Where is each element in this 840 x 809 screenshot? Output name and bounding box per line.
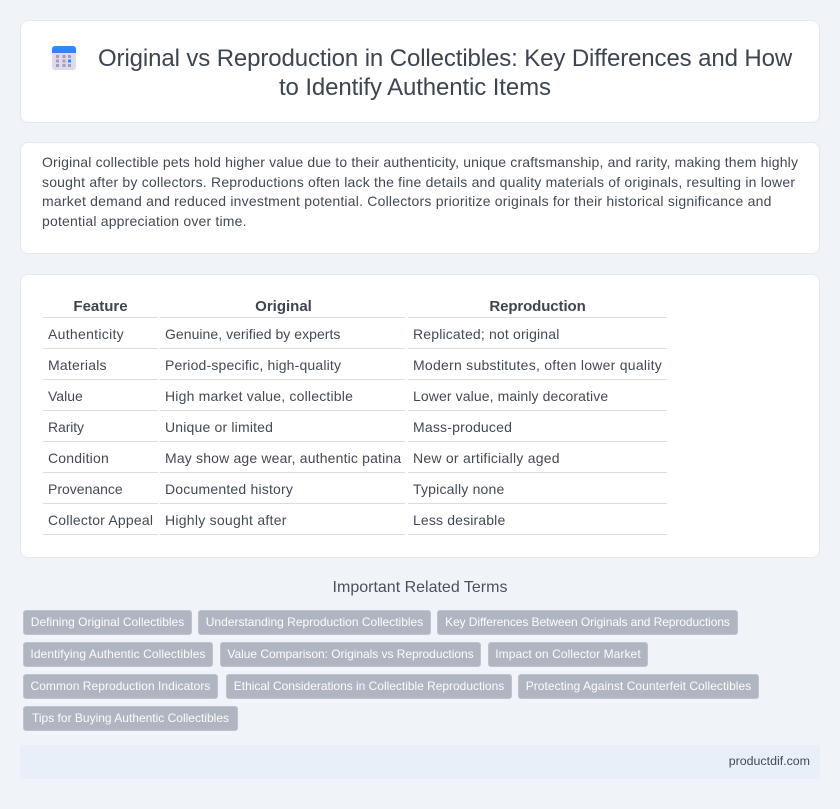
footer bar: [20, 745, 820, 779]
text block: introduction: market demand and reduced investment potential. Collectors prioritize originals for their historical significance and: [42, 193, 772, 209]
panel: introduction: [20, 142, 820, 254]
table header: Reproduction: [489, 298, 586, 315]
table row: materials: [43, 357, 667, 380]
table row: authenticity: [43, 326, 667, 349]
text block: introduction: sought after by collectors. Reproductions often lack the fine details and quality materials of originals, resulting in lower: [42, 174, 795, 190]
tag: [23, 610, 192, 635]
panel: title header: [20, 20, 820, 123]
table row: value: Lower value, mainly decorative: [413, 388, 608, 404]
panel: comparison table: [20, 274, 820, 558]
table row: condition: New or artificially aged: [413, 450, 560, 466]
tag: [437, 610, 738, 635]
text block: introduction: [42, 154, 798, 229]
tag: [488, 642, 648, 667]
table row: provenance: Typically none: [413, 481, 505, 497]
tag: Impact on Collector Market: [495, 647, 641, 661]
table row: condition: [43, 450, 667, 473]
table row: condition: May show age wear, authentic patina: [165, 450, 401, 466]
table row: condition: Condition: [48, 450, 109, 466]
tag: Defining Original Collectibles: [31, 615, 184, 629]
panel: title header: Original vs Reproduction in Collectibles: Key Differences and How: [98, 45, 792, 72]
table header: Feature: [73, 298, 128, 315]
table row: authenticity: Replicated; not original: [413, 326, 560, 342]
tag: Value Comparison: Originals vs Reproductions: [227, 647, 474, 661]
heading: important related terms: Important Related Terms: [333, 579, 507, 596]
tag: [226, 674, 512, 699]
table row: provenance: Documented history: [165, 481, 293, 497]
table row: collector appeal: Highly sought after: [165, 512, 287, 528]
table row: materials: Modern substitutes, often lower quality: [413, 357, 662, 373]
text block: introduction: Original collectible pets hold higher value due to their authenticity, unique craftsmanship, and rarity, making them highly: [42, 154, 798, 170]
tag: Common Reproduction Indicators: [31, 679, 210, 693]
table row: value: Value: [48, 388, 83, 404]
tag: Identifying Authentic Collectibles: [30, 647, 206, 661]
table row: provenance: [43, 481, 667, 504]
text block: introduction: potential appreciation over time.: [42, 213, 247, 229]
table row: provenance: Provenance: [48, 481, 123, 497]
tag: Understanding Reproduction Collectibles: [206, 615, 423, 629]
table row: value: [43, 388, 667, 411]
tag: [23, 706, 238, 731]
tag: Ethical Considerations in Collectible Reproductions: [234, 679, 504, 693]
tag: [198, 610, 431, 635]
table row: materials: Materials: [48, 357, 107, 373]
footer source text: productdif.com: [729, 754, 810, 768]
icon: calendar: [52, 46, 76, 70]
panel: title header: to Identify Authentic Items: [279, 74, 551, 101]
table row: value: High market value, collectible: [165, 388, 353, 404]
table row: collector appeal: Collector Appeal: [48, 512, 153, 528]
tag: Tips for Buying Authentic Collectibles: [32, 711, 229, 725]
table row: rarity: Unique or limited: [165, 419, 273, 435]
tag list: related terms: [23, 610, 759, 731]
table row: rarity: [43, 419, 667, 442]
table header: Original: [255, 298, 312, 315]
tag: [23, 674, 218, 699]
tag: [518, 674, 759, 699]
tag: [23, 642, 213, 667]
title: [98, 45, 792, 101]
table row: materials: Period-specific, high-quality: [165, 357, 341, 373]
table header: [43, 298, 667, 318]
tag: Key Differences Between Originals and Reproductions: [445, 615, 730, 629]
tag: [220, 642, 481, 667]
tag: Protecting Against Counterfeit Collectibles: [526, 679, 751, 693]
table row: collector appeal: [43, 512, 667, 535]
table row: rarity: Mass-produced: [413, 419, 512, 435]
table row: authenticity: Authenticity: [48, 326, 124, 342]
table row: authenticity: Genuine, verified by experts: [165, 326, 340, 342]
table row: rarity: Rarity: [48, 419, 84, 435]
table row: collector appeal: Less desirable: [413, 512, 505, 528]
